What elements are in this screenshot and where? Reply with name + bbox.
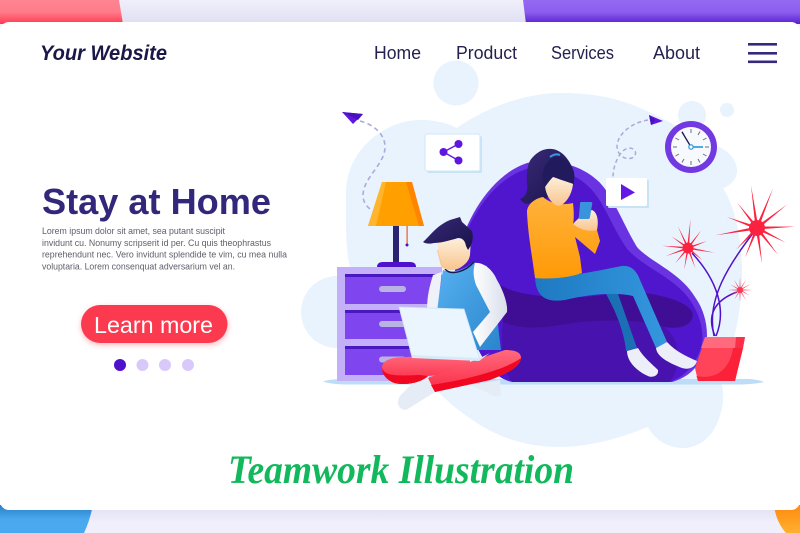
- far leg: [605, 291, 637, 351]
- plant: [660, 180, 800, 381]
- body text: invidunt cu. Nonumy scripserit id per. Cu quis theophrastus: [42, 237, 271, 248]
- nav: Product: Product: [456, 43, 517, 63]
- sweater: [527, 197, 600, 278]
- drawer 3: [345, 346, 442, 375]
- logo: Your Website: [40, 42, 167, 65]
- corner shape: orange bottom right: [774, 505, 800, 533]
- nav: About: About: [653, 43, 700, 63]
- sleeves: [427, 272, 442, 312]
- body text: reprehendunt nec. Vero invidunt splendide te vim, cu mea nulla: [42, 248, 288, 260]
- floor line: [323, 379, 764, 384]
- button: Learn more: [81, 305, 228, 345]
- socks: [398, 375, 501, 410]
- icon: hamburger menu: [748, 43, 777, 63]
- beanbag sofa: [455, 161, 707, 382]
- nav: Home: Home: [374, 43, 421, 63]
- collar trim: [445, 262, 474, 273]
- corner shape: blue bottom left: [0, 505, 93, 533]
- video card: [606, 178, 649, 208]
- face: [438, 238, 471, 269]
- phone: [579, 202, 592, 219]
- crossed legs: [382, 354, 470, 384]
- background blob: [301, 60, 742, 448]
- share card: [425, 134, 482, 173]
- stems: [692, 228, 757, 336]
- body text: Lorem ipsum dolor sit amet, sea putant suscipit: [42, 225, 225, 236]
- hair fringe: [542, 157, 574, 187]
- hand: [573, 210, 598, 231]
- icon: share: [440, 140, 462, 164]
- heading: Stay at Home: [42, 181, 271, 222]
- small flower: [728, 277, 752, 302]
- body text: voluptaria. Lorem consenquat adversarium vel an.: [42, 260, 235, 272]
- near leg: [535, 266, 667, 348]
- script title: Teamwork Illustration: [228, 447, 574, 492]
- drawer 2: [345, 310, 442, 339]
- illustration: [301, 60, 800, 448]
- medium flower: [660, 217, 717, 272]
- hair tie: [550, 154, 560, 157]
- paper plane right with dashed path: [613, 115, 663, 177]
- corner shape: red top left: [0, 0, 123, 24]
- neck: [437, 250, 468, 270]
- icon: play: [621, 184, 635, 200]
- socks: [627, 342, 697, 377]
- floor lamp: [368, 182, 424, 267]
- body text: [42, 225, 288, 272]
- large flower: [709, 180, 800, 269]
- face: [545, 176, 573, 206]
- drawer 1: [345, 274, 442, 304]
- flower pot: [695, 337, 745, 381]
- paper plane left with dashed path: [342, 112, 385, 211]
- clock: [665, 121, 717, 173]
- navigation: [374, 43, 700, 63]
- cabinet: [337, 267, 442, 381]
- laptop: [399, 307, 490, 361]
- hair: [423, 217, 473, 250]
- tank top: [435, 262, 501, 350]
- woman: [520, 149, 697, 377]
- pagination dots: [114, 359, 194, 371]
- corner shape: purple top right: [523, 0, 800, 24]
- man: [382, 217, 521, 410]
- button: Learn more: Learn more: [94, 312, 213, 338]
- ponytail and hair: [520, 149, 574, 204]
- nav: Services: Services: [551, 43, 614, 63]
